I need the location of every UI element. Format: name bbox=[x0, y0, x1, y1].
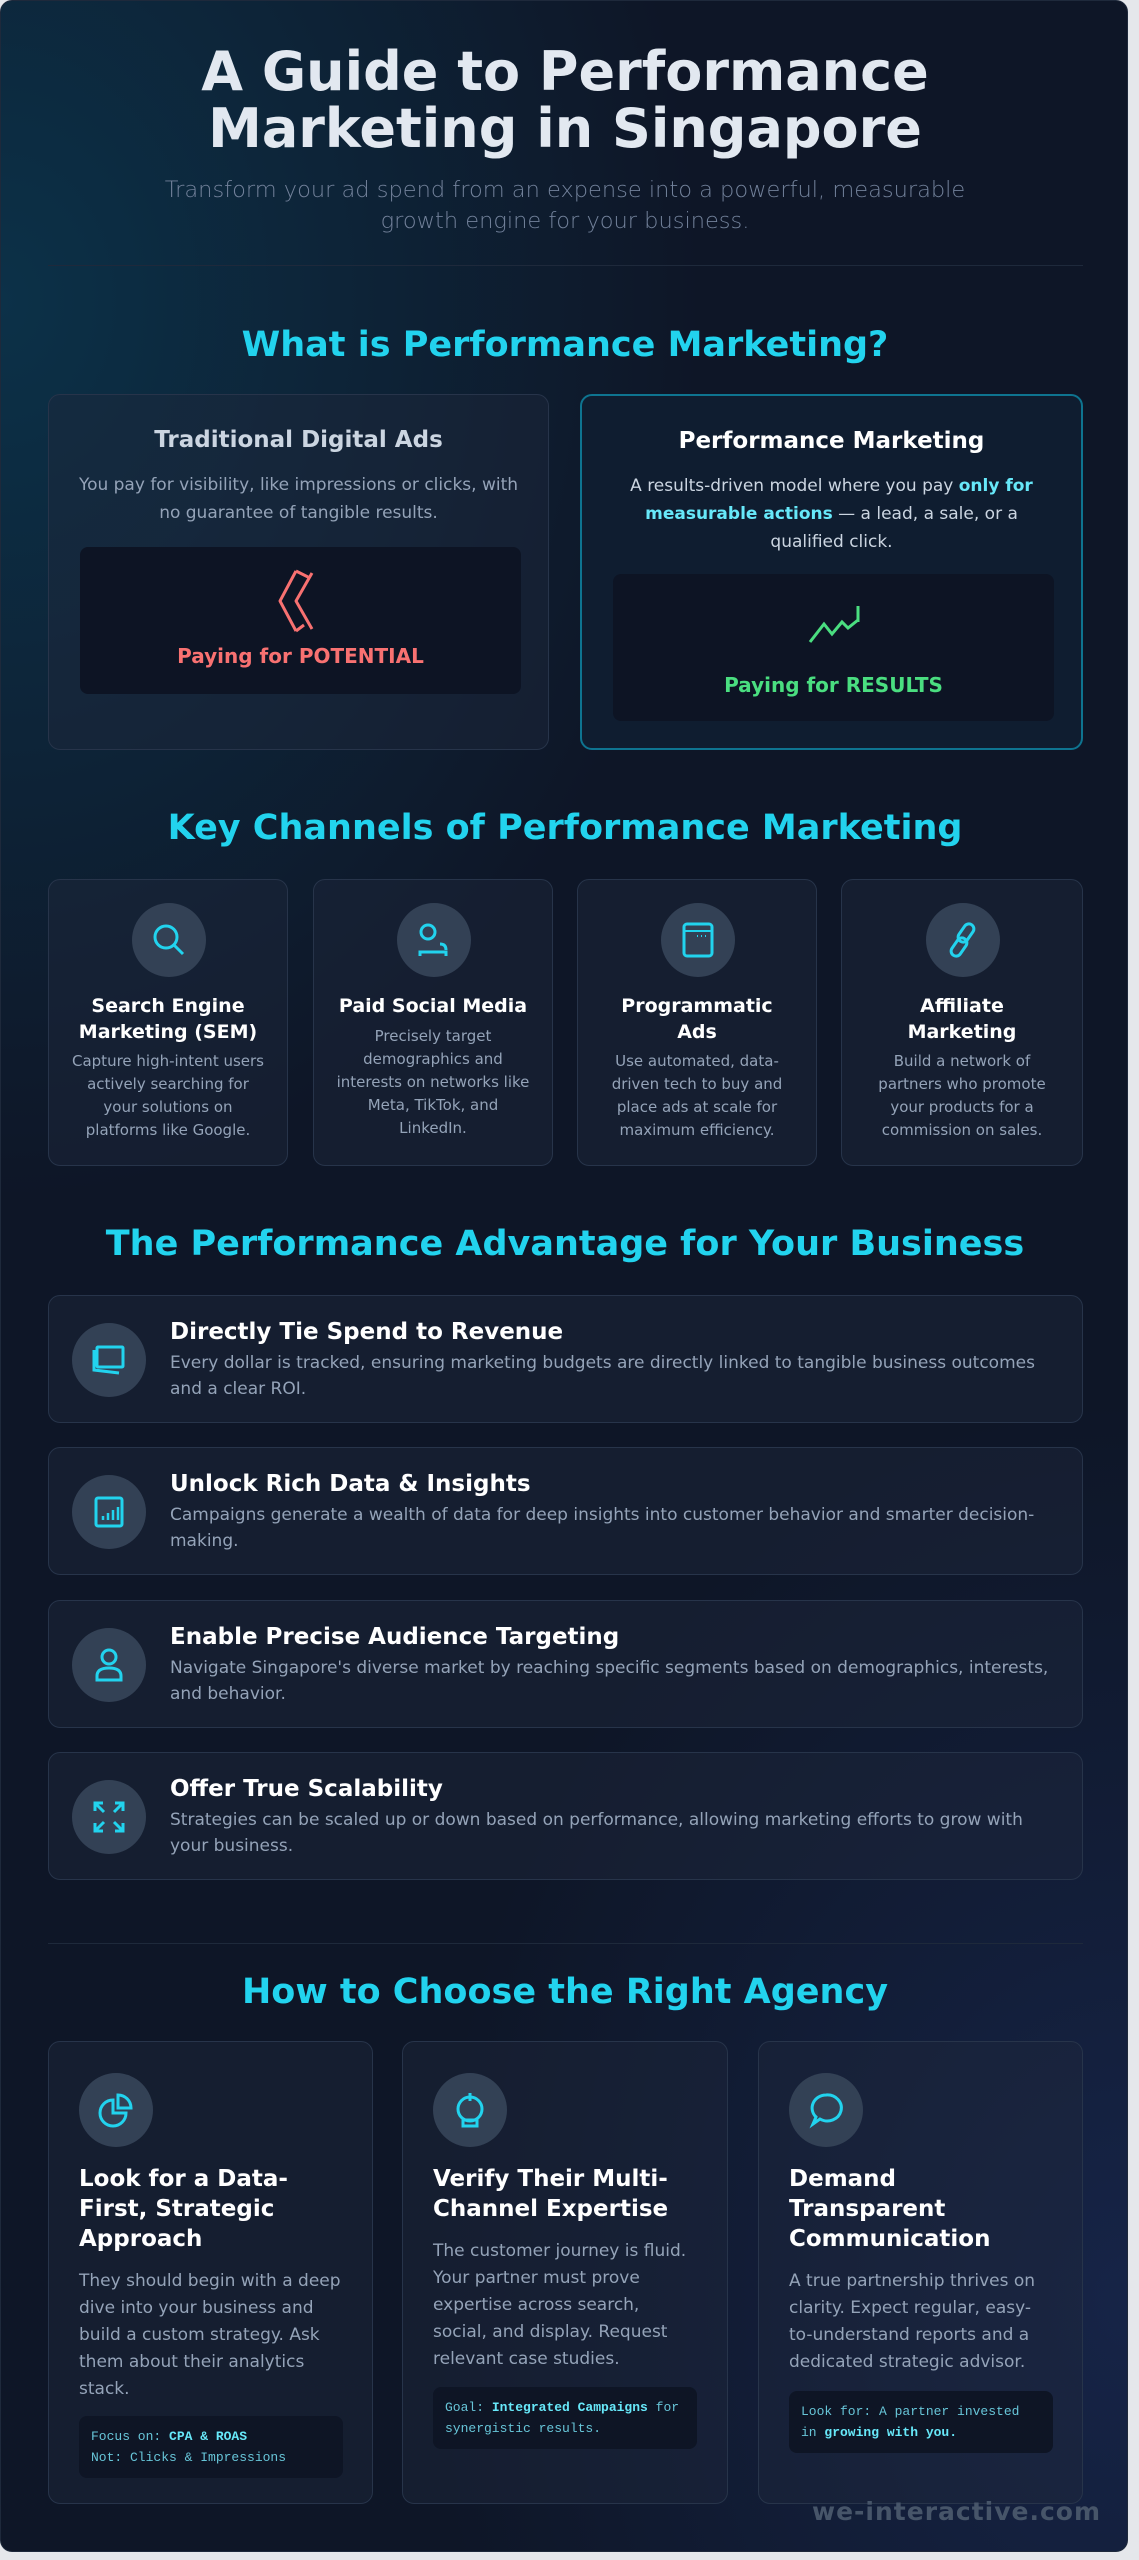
card title: Traditional Digital Ads bbox=[154, 427, 443, 453]
card text: A results-driven model where you pay only for bbox=[630, 476, 1033, 496]
subtitle: Transform your ad spend from an expense into a powerful, measurable bbox=[165, 177, 965, 203]
icon: chart bbox=[72, 1475, 146, 1549]
title: Offer True Scalability bbox=[170, 1776, 443, 1802]
card text: qualified click. bbox=[770, 532, 893, 552]
row: revenue bbox=[48, 1295, 1083, 1423]
panel: affiliate bbox=[841, 879, 1083, 1166]
text: Build a network of partners who promote your products for a commission on sales. bbox=[878, 1052, 1046, 1139]
label: Paying for POTENTIAL bbox=[177, 644, 424, 668]
icon: user bbox=[397, 903, 471, 977]
panel: social bbox=[313, 879, 553, 1166]
text: Capture high-intent users actively searching for your solutions on platforms like Google. bbox=[72, 1052, 264, 1139]
icon: chat bbox=[789, 2073, 863, 2147]
text: They should begin with a deep dive into your business and build a custom strategy. Ask them about their analytics stack. bbox=[79, 2271, 341, 2399]
heading: agency: How to Choose the Right Agency bbox=[242, 1972, 888, 2012]
title: Look for a Data- bbox=[79, 2166, 288, 2192]
title: Communication bbox=[789, 2226, 990, 2252]
heading: advantage: The Performance Advantage for Your Business bbox=[106, 1224, 1024, 1264]
icon: monitor bbox=[433, 2073, 507, 2147]
icon: link bbox=[926, 903, 1000, 977]
title: Marketing bbox=[908, 1021, 1016, 1043]
title: Approach bbox=[79, 2226, 202, 2252]
icon: arrows back bbox=[278, 570, 314, 632]
title: Paid Social Media bbox=[339, 995, 527, 1017]
heading: what is: What is Performance Marketing? bbox=[242, 325, 888, 365]
row: scalability bbox=[48, 1752, 1083, 1880]
title: Verify Their Multi- bbox=[433, 2166, 668, 2192]
row: data bbox=[48, 1447, 1083, 1575]
title bbox=[433, 2166, 668, 2222]
title: Transparent bbox=[789, 2196, 945, 2222]
title: Channel Expertise bbox=[433, 2196, 668, 2222]
card text bbox=[630, 476, 1033, 552]
title bbox=[79, 995, 257, 1043]
row: targeting bbox=[48, 1600, 1083, 1728]
subtitle: growth engine for your business. bbox=[381, 208, 749, 234]
card text: measurable actions — a lead, a sale, or a bbox=[645, 504, 1018, 524]
title bbox=[621, 995, 773, 1043]
panel: performance marketing bbox=[580, 394, 1083, 750]
title: A Guide to Performance bbox=[201, 40, 929, 103]
text: Navigate Singapore's diverse market by reaching specific segments based on demographics, interests, and behavior. bbox=[170, 1658, 1048, 1704]
code box bbox=[433, 2387, 697, 2449]
text: A true partnership thrives on clarity. Expect regular, easy-to-understand reports and a dedicated strategic advisor. bbox=[789, 2271, 1035, 2372]
text: Precisely target demographics and interests on networks like Meta, TikTok, and LinkedIn. bbox=[337, 1027, 529, 1137]
panel: programmatic bbox=[577, 879, 817, 1166]
panel: multichannel bbox=[402, 2041, 728, 2504]
title: Enable Precise Audience Targeting bbox=[170, 1624, 619, 1650]
code box: Goal: Integrated Campaigns for synergistic results. bbox=[445, 2400, 679, 2436]
card text: You pay for visibility, like impressions or clicks, with bbox=[79, 475, 518, 495]
panel: transparency bbox=[758, 2041, 1083, 2504]
icon: browser bbox=[661, 903, 735, 977]
icon: person bbox=[72, 1628, 146, 1702]
code box: Look for: A partner invested in growing with you. bbox=[801, 2404, 1019, 2440]
code box bbox=[789, 2391, 1053, 2453]
text: The customer journey is fluid. Your partner must prove expertise across search, social, and display. Request relevant case studies. bbox=[433, 2241, 686, 2369]
code box bbox=[79, 2416, 343, 2478]
icon: expand bbox=[72, 1780, 146, 1854]
code box: Not: Clicks & Impressions bbox=[91, 2450, 286, 2465]
title bbox=[201, 40, 929, 160]
title bbox=[789, 2166, 990, 2252]
subtitle bbox=[165, 177, 965, 234]
heading: channels: Key Channels of Performance Marketing bbox=[168, 808, 962, 848]
icon: trend up bbox=[808, 606, 860, 643]
title: Affiliate bbox=[920, 995, 1004, 1017]
panel: data-first bbox=[48, 2041, 373, 2504]
title: First, Strategic bbox=[79, 2196, 274, 2222]
code box: Focus on: CPA & ROAS bbox=[91, 2429, 247, 2444]
icon: pie bbox=[79, 2073, 153, 2147]
title: Marketing (SEM) bbox=[79, 1021, 257, 1043]
card text: no guarantee of tangible results. bbox=[159, 503, 438, 523]
title: Directly Tie Spend to Revenue bbox=[170, 1319, 563, 1345]
text: Campaigns generate a wealth of data for deep insights into customer behavior and smarter decision-making. bbox=[170, 1505, 1034, 1551]
title: Unlock Rich Data & Insights bbox=[170, 1471, 531, 1497]
text: Use automated, data-driven tech to buy and place ads at scale for maximum efficiency. bbox=[612, 1052, 782, 1139]
title bbox=[908, 995, 1016, 1043]
inner box: potential bbox=[80, 547, 521, 694]
panel: traditional ads bbox=[48, 394, 549, 750]
label: Paying for RESULTS bbox=[724, 673, 943, 697]
title: Marketing in Singapore bbox=[208, 97, 922, 160]
inner box: results bbox=[613, 574, 1054, 721]
panel: SEM bbox=[48, 879, 288, 1166]
title: Programmatic bbox=[621, 995, 773, 1017]
title: Demand bbox=[789, 2166, 896, 2192]
title: Ads bbox=[677, 1021, 717, 1043]
title: Search Engine bbox=[91, 995, 245, 1017]
card title: Performance Marketing bbox=[679, 428, 984, 454]
title bbox=[79, 2166, 288, 2252]
icon: search bbox=[132, 903, 206, 977]
icon: money bbox=[72, 1323, 146, 1397]
footer brand: we-interactive.com bbox=[812, 2497, 1101, 2526]
card text bbox=[79, 475, 518, 523]
text: Strategies can be scaled up or down based on performance, allowing marketing efforts to grow with your business. bbox=[170, 1810, 1023, 1856]
text: Every dollar is tracked, ensuring marketing budgets are directly linked to tangible business outcomes and a clear ROI. bbox=[170, 1353, 1035, 1399]
